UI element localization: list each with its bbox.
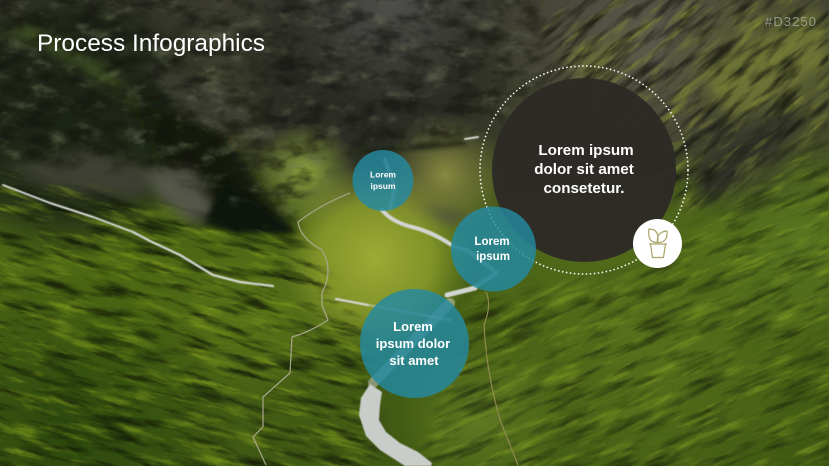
main dark circle callout: Lorem ipsum <box>538 142 634 159</box>
label: colour code: #D3250 <box>765 14 816 29</box>
step circle: medium: ipsum <box>476 251 510 263</box>
step circle: large <box>360 289 469 398</box>
step circle: large: Lorem <box>393 319 433 334</box>
title: Process Infographics <box>37 30 265 57</box>
step circle: small <box>352 150 414 211</box>
step circle: small: Lorem <box>370 170 396 180</box>
main dark circle callout <box>492 78 676 262</box>
step circle: large: sit amet <box>389 353 439 368</box>
dotted ring <box>480 66 688 274</box>
walking paths <box>253 193 518 465</box>
river lower channel <box>359 384 432 466</box>
step circle: medium <box>451 206 536 292</box>
step circle: large: ipsum dolor <box>376 336 450 351</box>
main dark circle callout: dolor sit amet <box>534 161 634 178</box>
icon: potted plant <box>633 219 682 268</box>
step circle: small: ipsum <box>370 181 396 191</box>
river and waterfall <box>3 137 497 383</box>
step circle: medium: Lorem <box>474 236 510 248</box>
main dark circle callout: consetetur. <box>543 180 625 197</box>
